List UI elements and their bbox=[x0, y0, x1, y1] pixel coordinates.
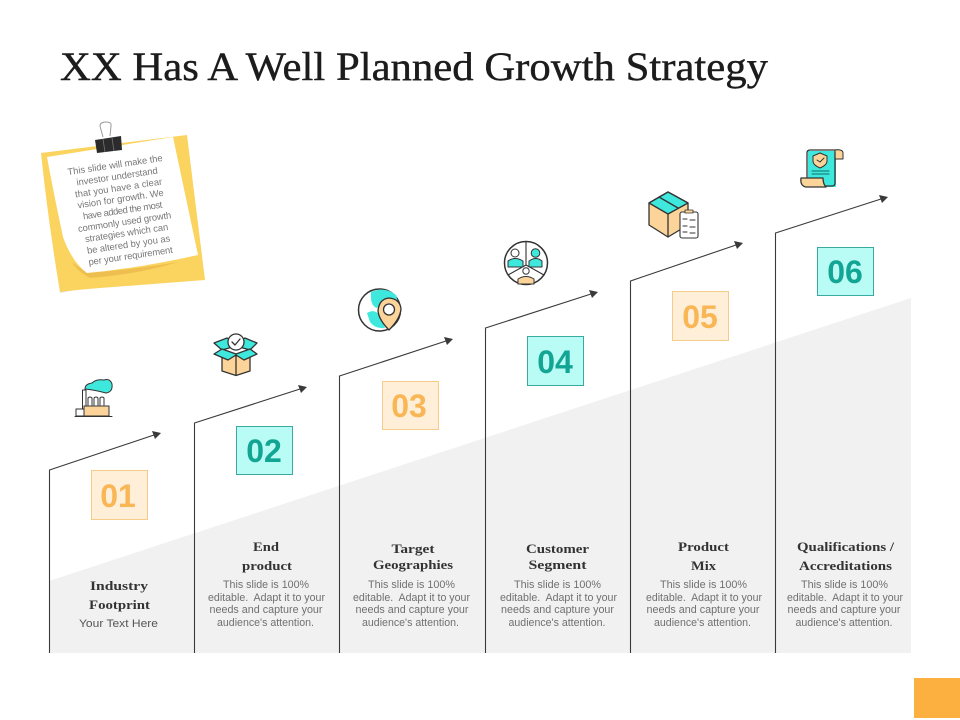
label: Customer Segment: needs and capture your bbox=[501, 604, 614, 616]
icon: package with clipboard bbox=[649, 192, 698, 238]
icon: open box with check bbox=[214, 334, 257, 376]
step 2: arrow bbox=[194, 385, 307, 653]
icon: customer segment circle bbox=[504, 242, 548, 284]
note text: be altered by you as bbox=[86, 232, 171, 256]
number box 01 bbox=[92, 470, 148, 520]
label: Target Geographies: editable. Adapt it to your bbox=[353, 592, 470, 604]
note text: per your requirement bbox=[88, 244, 174, 267]
label: Product Mix: This slide is 100% bbox=[660, 579, 747, 591]
label: Customer Segment: Customer bbox=[526, 542, 590, 556]
label: Target Geographies: Target bbox=[392, 542, 436, 556]
label: Qualifications / Accreditations: Qualifications / bbox=[797, 540, 895, 554]
label: End product: End bbox=[253, 540, 279, 554]
label: Product Mix: audience's attention. bbox=[654, 617, 751, 629]
number box 04 bbox=[528, 336, 584, 386]
label: End product bbox=[208, 540, 325, 629]
number box 05: 05 bbox=[682, 299, 718, 335]
label: Customer Segment: Segment bbox=[528, 558, 588, 572]
label: Target Geographies: Geographies bbox=[373, 558, 453, 572]
label: Industry Footprint: Footprint bbox=[89, 598, 151, 612]
sticky note bbox=[41, 122, 205, 293]
icon: globe with pin bbox=[358, 289, 401, 331]
step 3: arrow bbox=[340, 337, 453, 653]
label: Product Mix: editable. Adapt it to your bbox=[646, 592, 762, 604]
label: End product: needs and capture your bbox=[210, 604, 323, 616]
icon: certificate scroll bbox=[801, 150, 843, 187]
label: Industry Footprint: Your Text Here bbox=[79, 618, 158, 630]
label: Qualifications / Accreditations: This slide is 100% bbox=[801, 579, 888, 591]
note text: that you have a clear bbox=[74, 176, 163, 199]
label: Industry Footprint bbox=[79, 579, 158, 630]
number box 06: 06 bbox=[827, 254, 863, 290]
note text: have added the most bbox=[82, 199, 163, 221]
label: Target Geographies: audience's attention. bbox=[362, 617, 459, 629]
label: Customer Segment bbox=[500, 542, 617, 629]
note text: strategies which can bbox=[84, 221, 169, 244]
label: Product Mix: Product bbox=[678, 540, 730, 554]
label: Qualifications / Accreditations: editable. Adapt it to your bbox=[787, 592, 903, 604]
note text: commonly used growth bbox=[77, 209, 172, 234]
number box 02: 02 bbox=[246, 433, 282, 469]
number box 01: 01 bbox=[100, 478, 136, 514]
note text bbox=[67, 152, 174, 267]
label: End product: This slide is 100% bbox=[223, 579, 309, 591]
icon: binder clip bbox=[95, 122, 122, 153]
label: Qualifications / Accreditations: audience's attention. bbox=[796, 617, 892, 629]
number box 04: 04 bbox=[537, 344, 573, 380]
label: Target Geographies: This slide is 100% bbox=[368, 579, 455, 591]
number box 05 bbox=[672, 292, 728, 340]
icon: factory bbox=[75, 380, 112, 416]
label: Customer Segment: editable. Adapt it to your bbox=[500, 592, 617, 604]
number box 03: 03 bbox=[391, 388, 427, 424]
note text: vision for growth. We bbox=[77, 187, 164, 210]
label: Customer Segment: audience's attention. bbox=[508, 617, 606, 629]
number box 02 bbox=[236, 426, 292, 474]
label: Product Mix: Mix bbox=[691, 559, 717, 573]
number box 06 bbox=[818, 248, 874, 296]
label: End product: product bbox=[242, 559, 293, 573]
label: Product Mix: needs and capture your bbox=[646, 604, 760, 616]
number box 03 bbox=[382, 382, 438, 430]
orange corner block bbox=[914, 678, 960, 718]
step 6: arrow bbox=[776, 195, 888, 653]
label: Customer Segment: This slide is 100% bbox=[514, 579, 601, 591]
note text: This slide will make the bbox=[67, 152, 163, 177]
label: Qualifications / Accreditations: Accreditations bbox=[799, 559, 892, 573]
label: End product: editable. Adapt it to your bbox=[208, 592, 325, 604]
title: XX Has A Well Planned Growth Strategy bbox=[60, 44, 768, 89]
label: Qualifications / Accreditations: needs and capture your bbox=[788, 604, 901, 616]
label: End product: audience's attention. bbox=[217, 617, 314, 629]
label: Target Geographies: needs and capture your bbox=[356, 604, 469, 616]
step 4: arrow bbox=[486, 290, 598, 653]
note text: investor understand bbox=[76, 165, 158, 188]
step 1: arrow bbox=[50, 431, 161, 653]
label: Qualifications / Accreditations bbox=[787, 540, 903, 629]
label: Product Mix bbox=[646, 540, 762, 629]
label: Target Geographies bbox=[353, 542, 470, 629]
label: Industry Footprint: Industry bbox=[90, 579, 149, 593]
step 5: arrow bbox=[630, 241, 743, 653]
grey rising background bbox=[49, 298, 911, 653]
